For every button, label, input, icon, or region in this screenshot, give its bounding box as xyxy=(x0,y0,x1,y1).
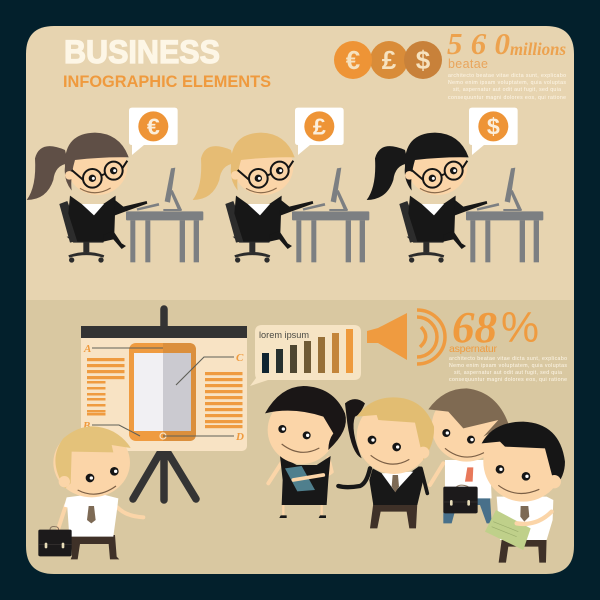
collar xyxy=(82,204,104,215)
board surface xyxy=(81,330,247,451)
head xyxy=(53,428,130,497)
desk and monitor xyxy=(292,168,369,262)
speech bubble: dollar xyxy=(469,108,518,155)
statistic: 68 percent: 68 xyxy=(452,303,497,352)
statistic: 560 millions: 560 xyxy=(447,26,510,61)
tablet xyxy=(129,343,196,441)
chair xyxy=(399,201,446,263)
desk and monitor xyxy=(466,168,543,262)
icon: currency coins: $ xyxy=(416,45,431,75)
briefcase xyxy=(38,527,72,556)
statistic: 560 millions: millions xyxy=(510,39,566,59)
hair xyxy=(55,426,131,488)
callout letters xyxy=(82,343,244,443)
callout letters: A xyxy=(83,343,91,355)
chair xyxy=(59,201,106,263)
title xyxy=(63,34,271,91)
person: woman in black dress xyxy=(265,386,365,518)
desk and monitor xyxy=(126,168,203,262)
arms xyxy=(58,505,143,528)
shirt xyxy=(64,495,118,537)
head xyxy=(405,133,469,195)
bar chart callout: lorem ipsum xyxy=(259,330,309,340)
icon: currency coins xyxy=(334,41,442,79)
person: dark-haired man with folder xyxy=(482,422,565,563)
right text lines xyxy=(205,372,242,428)
chair xyxy=(225,201,272,263)
ponytail xyxy=(193,146,234,200)
icon: currency coins: £ xyxy=(382,45,397,75)
speech bubble: euro xyxy=(129,108,178,155)
icon: megaphone speaker xyxy=(367,310,445,364)
group of colleagues xyxy=(265,386,565,563)
statistic: 560 millions xyxy=(447,26,566,71)
statistic: 560 millions: beatae xyxy=(448,57,488,71)
glasses and face xyxy=(412,161,467,193)
presentation board xyxy=(81,309,247,500)
statistic: 68 percent: aspernatur xyxy=(449,343,498,355)
text block: lower description: architecto beatae vitae dicta sunt, explicabo xyxy=(449,356,567,362)
head xyxy=(65,133,129,195)
callout letters: B xyxy=(82,420,90,432)
statistic: 68 percent: % xyxy=(501,304,539,352)
title: INFOGRAPHIC ELEMENTS xyxy=(63,72,271,91)
briefcase held xyxy=(443,485,478,513)
board top bar xyxy=(81,326,247,338)
head xyxy=(231,133,295,195)
ponytail xyxy=(27,146,68,200)
left text lines xyxy=(87,358,124,416)
text block: lower description: consequuntur magni dolores eos, qui ratione xyxy=(449,377,567,383)
speech bubble: pound: £ xyxy=(313,114,326,140)
bar chart callout xyxy=(250,325,361,386)
text block: lower description: Nemo enim ipsam voluptatem, quia voluptas xyxy=(449,363,567,369)
text block: top description xyxy=(448,73,566,101)
tie xyxy=(87,506,96,523)
text block: top description: sit, aspernatur aut odit aut fugit, sed quia xyxy=(453,87,561,93)
body xyxy=(234,196,313,249)
ponytail xyxy=(367,146,408,200)
callout letters: C xyxy=(236,352,244,364)
body xyxy=(68,196,147,249)
callout leader lines xyxy=(92,348,234,436)
face xyxy=(78,467,119,494)
worker 1 at desk with euro bubble xyxy=(27,108,203,263)
tripod stand xyxy=(133,309,196,500)
glasses and face xyxy=(238,161,293,193)
text block: lower description xyxy=(449,356,567,383)
worker 3 at desk with dollar bubble xyxy=(367,108,543,263)
text block: top description: consequuntur magni dolores eos, qui ratione xyxy=(448,95,566,101)
person: man with brown hair behind xyxy=(428,388,508,523)
text block: top description: Nemo enim ipsam voluptatem, quia voluptas xyxy=(448,80,566,86)
person: blond man in suit xyxy=(338,397,434,528)
speech bubble: pound xyxy=(295,108,344,155)
collar xyxy=(248,204,270,215)
legs xyxy=(71,535,119,559)
worker 2 at desk with pound bubble xyxy=(193,108,369,263)
speech bubble: dollar: $ xyxy=(487,114,500,140)
text block: top description: architecto beatae vitae dicta sunt, explicabo xyxy=(448,73,566,79)
glasses and face xyxy=(72,161,127,193)
icon: currency coins: € xyxy=(346,45,360,75)
ear xyxy=(59,476,70,487)
person: presenter with briefcase xyxy=(38,426,143,559)
statistic: 68 percent xyxy=(449,303,539,355)
collar xyxy=(422,204,444,215)
title: BUSINESS xyxy=(64,34,220,70)
body xyxy=(408,196,487,249)
speech bubble: euro: € xyxy=(147,114,160,140)
callout letters: D xyxy=(235,431,244,443)
text block: lower description: sit, aspernatur aut odit aut fugit, sed quia xyxy=(454,370,562,376)
